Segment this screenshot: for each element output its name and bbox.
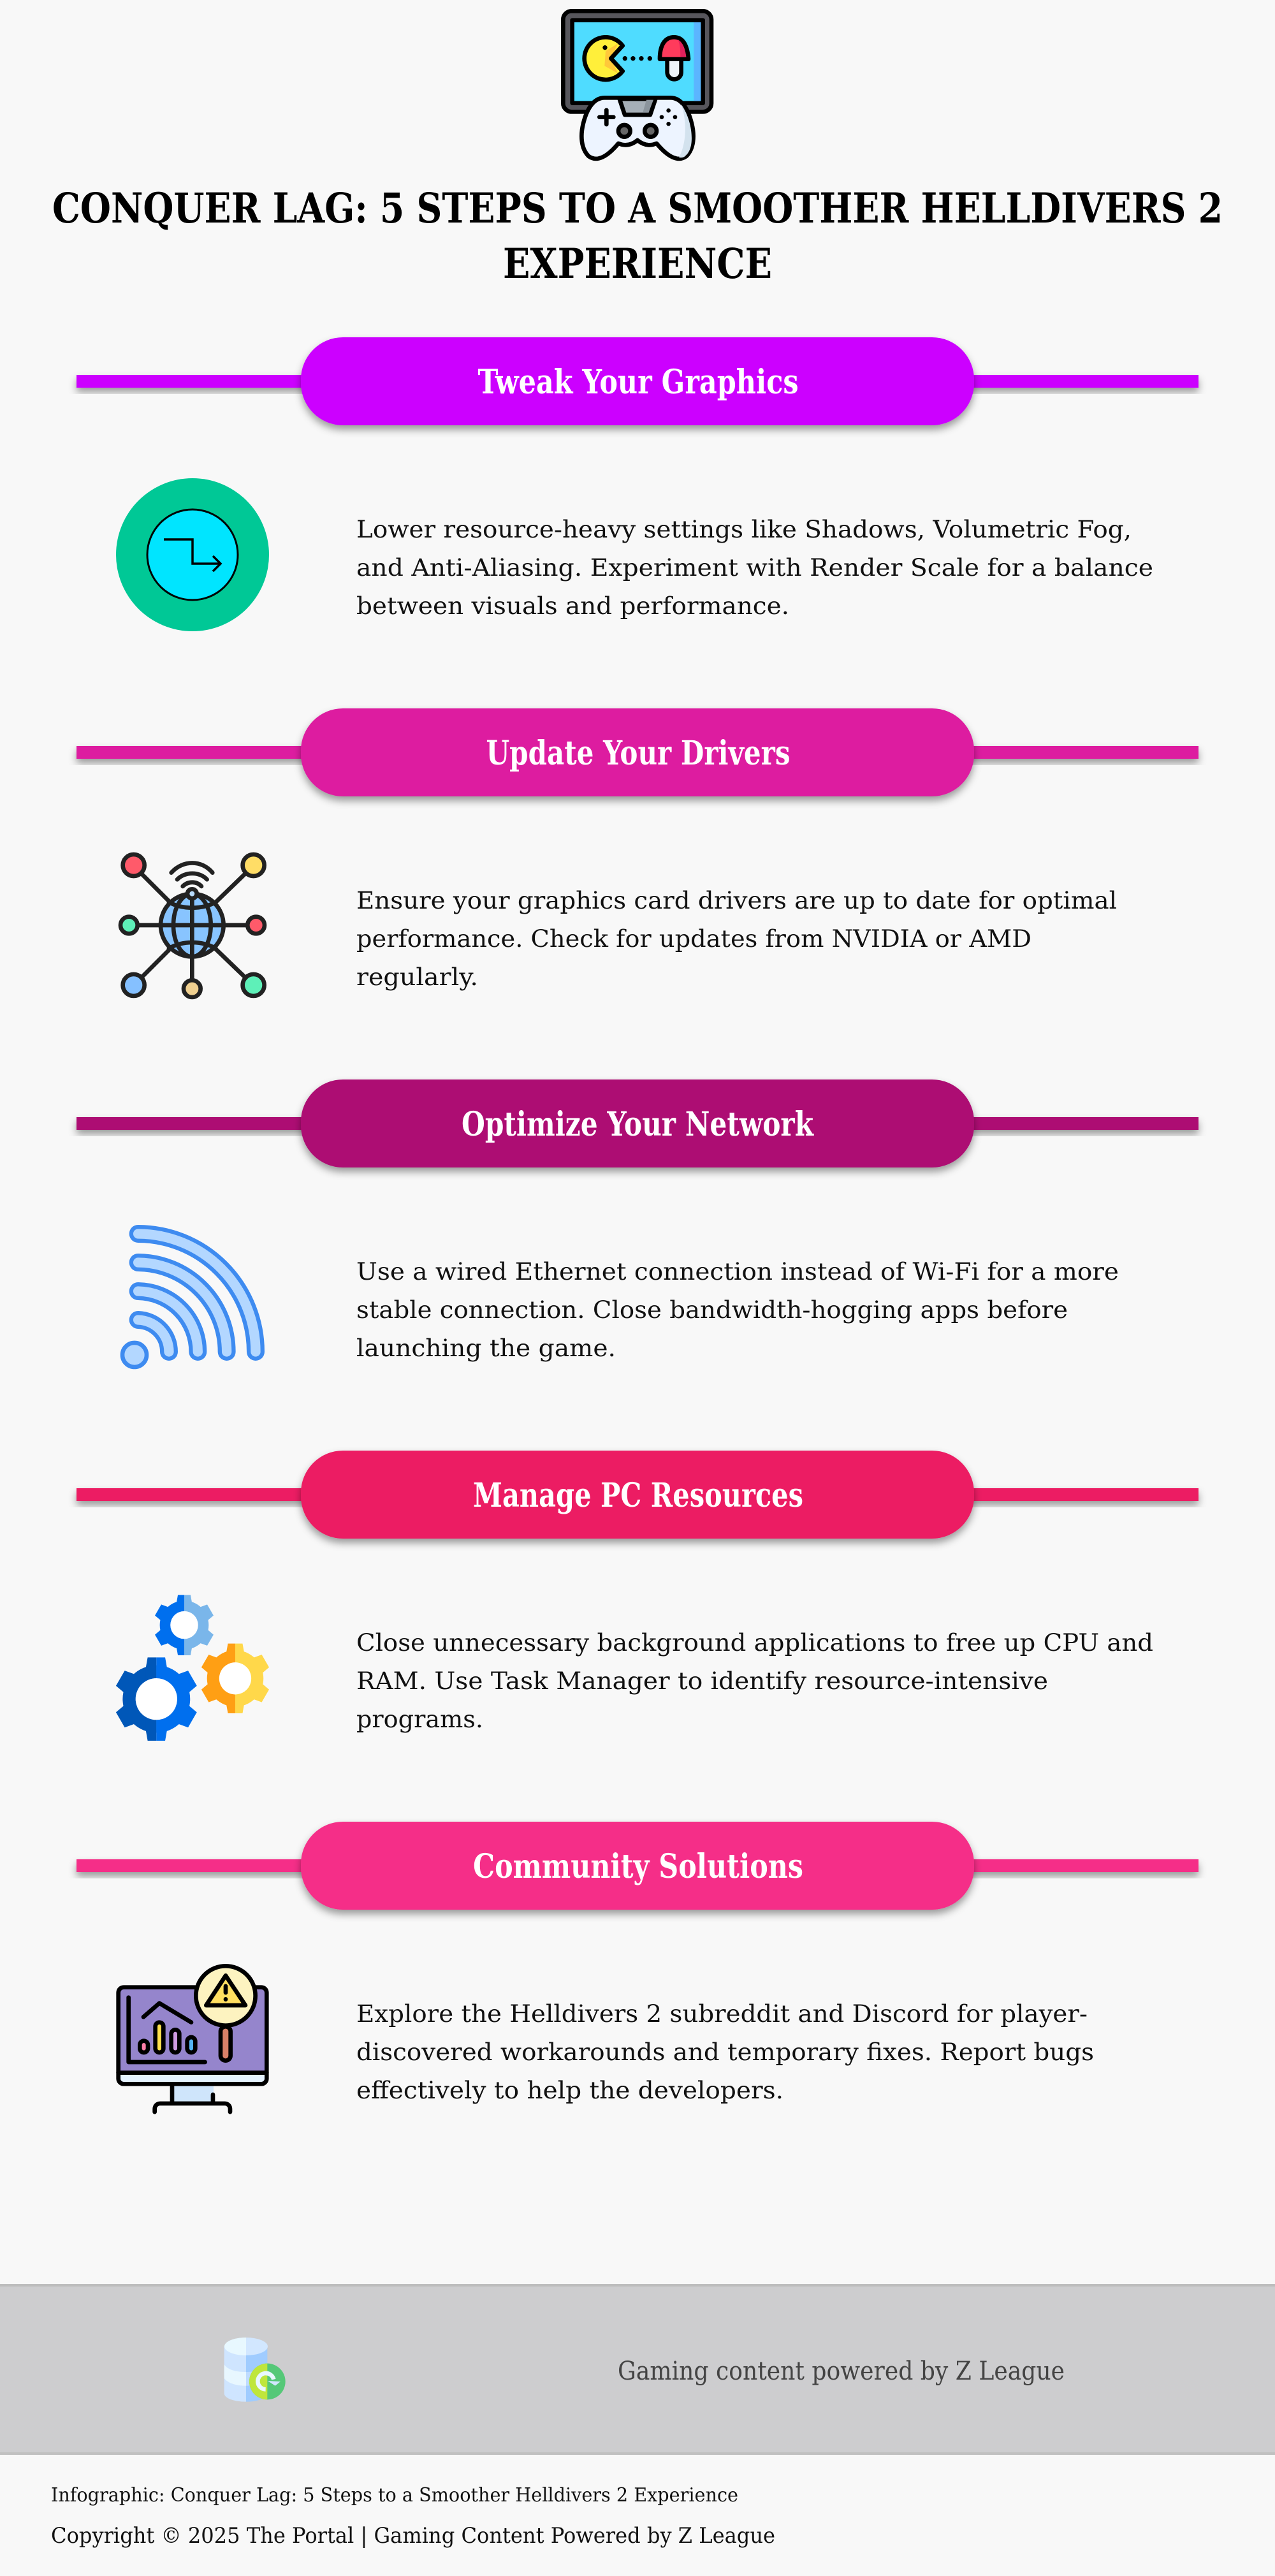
panel: manage pc resources xyxy=(76,1451,1198,1741)
text: tweak your graphics: Lower resource-heavy settings like Shadows, Volumetric Fog, xyxy=(356,516,1132,543)
text: manage pc resources: programs. xyxy=(356,1706,483,1733)
text: tweak your graphics: and Anti-Aliasing. Experiment with Render Scale for a balance xyxy=(356,554,1153,582)
icon: monitor with warning magnifier xyxy=(119,1966,266,2112)
section header: optimize your network xyxy=(76,1079,1198,1167)
panel: optimize your network xyxy=(76,1079,1198,1367)
icon: globe network xyxy=(120,854,265,997)
text: manage pc resources: RAM. Use Task Manager to identify resource-intensive xyxy=(356,1667,1048,1695)
text: update your drivers: Ensure your graphics card drivers are up to date for optimal xyxy=(356,887,1117,914)
section header: manage pc resources xyxy=(76,1451,1198,1539)
text: tweak your graphics xyxy=(356,516,1153,620)
text: manage pc resources xyxy=(356,1629,1153,1733)
section header: update your drivers: Update Your Drivers xyxy=(486,734,790,773)
icon: gears xyxy=(115,1595,270,1741)
panel: community solutions xyxy=(76,1822,1198,2112)
icon: wifi signal xyxy=(122,1234,256,1367)
text: manage pc resources: Close unnecessary background applications to free up CPU and xyxy=(356,1629,1153,1657)
section header: community solutions: Community Solutions xyxy=(473,1847,803,1886)
text: community solutions: discovered workarounds and temporary fixes. Report bugs xyxy=(356,2038,1094,2066)
panel: tweak your graphics xyxy=(76,337,1198,631)
text: tweak your graphics: between visuals and performance. xyxy=(356,592,789,620)
title xyxy=(52,184,1223,288)
text: community solutions xyxy=(356,2000,1094,2104)
section header: update your drivers xyxy=(76,708,1198,796)
footer text: Copyright © 2025 The Portal | Gaming Content Powered by Z League xyxy=(51,2523,775,2549)
footer text: Infographic: Conquer Lag: 5 Steps to a Smoother Helldivers 2 Experience xyxy=(51,2484,738,2506)
text: community solutions: effectively to help the developers. xyxy=(356,2077,783,2104)
section header: tweak your graphics: Tweak Your Graphics xyxy=(478,363,798,402)
text: optimize your network: stable connection. Close bandwidth-hogging apps before xyxy=(356,1296,1068,1324)
text: optimize your network xyxy=(356,1258,1119,1362)
icon: database sync xyxy=(224,2338,286,2402)
text: update your drivers xyxy=(356,887,1117,991)
sponsor band xyxy=(0,2284,1275,2455)
sponsor text: Gaming content powered by Z League xyxy=(618,2357,1065,2386)
section header: tweak your graphics xyxy=(76,337,1198,425)
panel: update your drivers xyxy=(76,708,1198,997)
section header: manage pc resources: Manage PC Resources xyxy=(473,1476,803,1515)
text: optimize your network: Use a wired Ethernet connection instead of Wi-Fi for a more xyxy=(356,1258,1119,1285)
title: EXPERIENCE xyxy=(503,240,772,288)
section header: community solutions xyxy=(76,1822,1198,1910)
icon: game screen and controller xyxy=(563,11,711,159)
footer text xyxy=(51,2484,775,2549)
section header: optimize your network: Optimize Your Network xyxy=(462,1105,814,1144)
text: update your drivers: regularly. xyxy=(356,963,478,991)
text: optimize your network: launching the game. xyxy=(356,1335,616,1362)
icon: circular arrow badge xyxy=(116,478,269,631)
text: community solutions: Explore the Helldivers 2 subreddit and Discord for player- xyxy=(356,2000,1088,2028)
text: update your drivers: performance. Check for updates from NVIDIA or AMD xyxy=(356,925,1031,953)
